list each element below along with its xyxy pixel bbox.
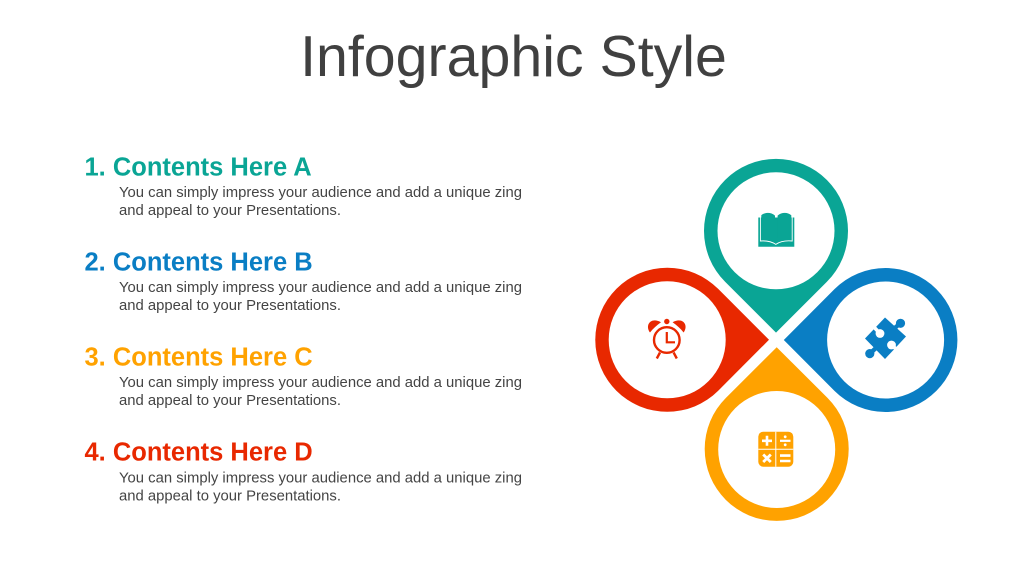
panel: contents list	[84, 154, 522, 504]
icon: open book	[758, 213, 794, 247]
item 2: contents B	[84, 248, 522, 314]
description D: You can simply impress your audience and add a unique zing	[119, 470, 522, 486]
pin: red left	[595, 268, 769, 412]
description B: You can simply impress your audience and add a unique zing	[119, 280, 522, 296]
heading D: 4. Contents Here D	[84, 438, 313, 466]
heading A: 1. Contents Here A	[84, 154, 312, 182]
item 1: contents A	[84, 154, 522, 219]
description A: and appeal to your Presentations.	[119, 203, 341, 219]
pin: blue right	[784, 268, 957, 412]
description A: You can simply impress your audience and add a unique zing	[119, 185, 522, 201]
heading C: 3. Contents Here C	[84, 344, 313, 372]
diagram: four teardrop pins	[595, 159, 957, 521]
item 3: contents C	[84, 344, 522, 409]
description C: and appeal to your Presentations.	[119, 393, 341, 409]
heading B: 2. Contents Here B	[84, 248, 313, 276]
description C: You can simply impress your audience and add a unique zing	[119, 375, 522, 391]
description B: and appeal to your Presentations.	[119, 298, 341, 314]
icon: calculator	[758, 432, 793, 467]
pin: teal top	[704, 159, 848, 333]
title: Infographic Style	[300, 25, 727, 89]
pin: orange bottom	[705, 347, 849, 521]
description D: and appeal to your Presentations.	[119, 488, 341, 504]
icon: puzzle piece	[865, 318, 906, 359]
icon: alarm clock	[648, 319, 686, 358]
item 4: contents D	[84, 438, 522, 504]
